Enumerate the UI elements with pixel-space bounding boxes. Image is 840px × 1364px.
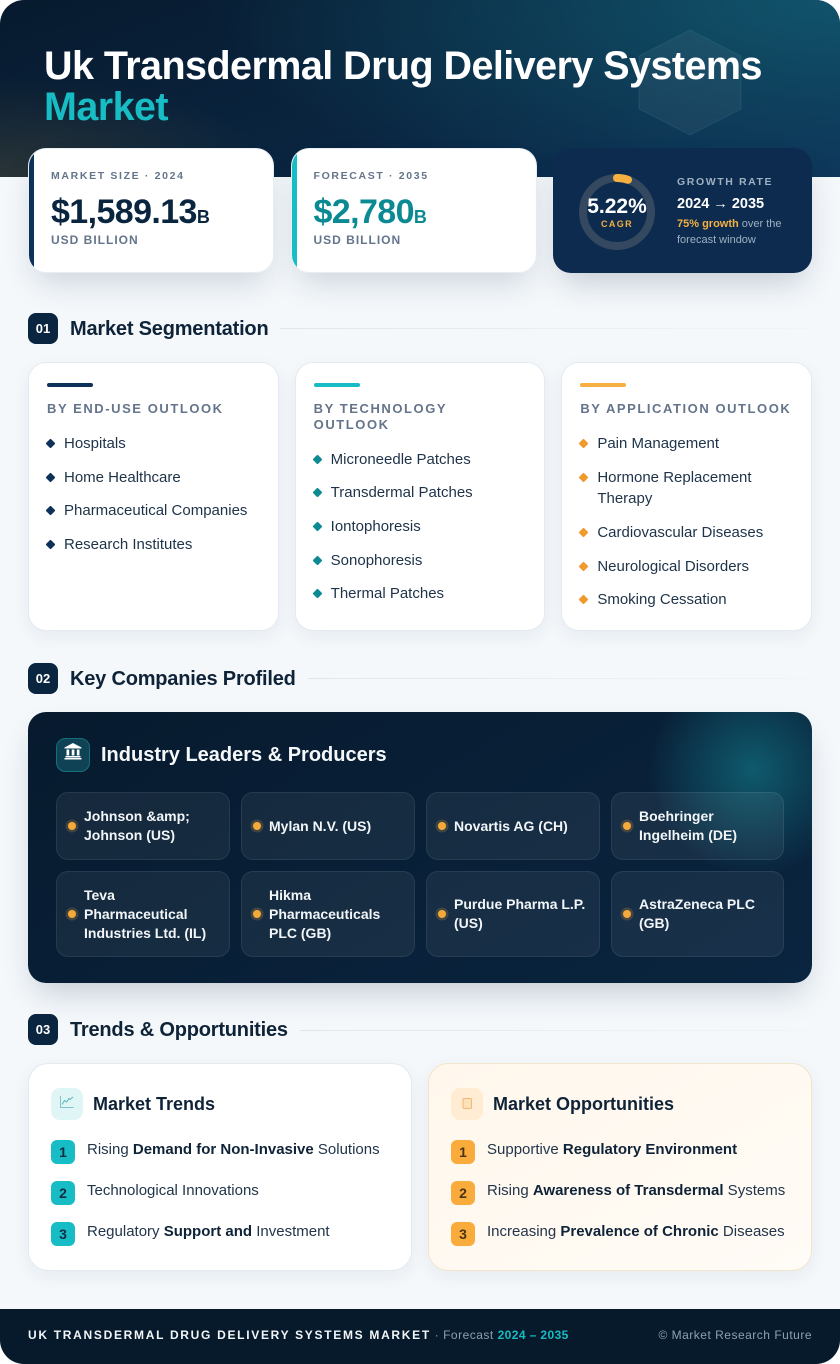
footer title: UK TRANSDERMAL DRUG DELIVERY SYSTEMS MARKET · Forecast 2024 – 2035	[28, 1328, 569, 1342]
panel: end-use: BY END-USE OUTLOOK	[47, 401, 224, 416]
opportunity 1	[451, 1140, 475, 1164]
section badge 01	[28, 313, 58, 344]
CAGR label: CAGR	[601, 219, 633, 229]
opportunity 3	[451, 1222, 475, 1246]
trend 2: 2	[59, 1185, 67, 1201]
trend 2	[51, 1181, 75, 1205]
growth label: GROWTH RATE	[677, 176, 773, 188]
stat card: forecast	[290, 148, 536, 273]
opportunity 1: 1	[459, 1144, 467, 1160]
card heading: Market Trends	[93, 1094, 215, 1114]
panel: market trends: Technological Innovations	[87, 1182, 259, 1198]
trend 3: 3	[59, 1226, 67, 1242]
stat card: forecast: USD BILLION	[314, 233, 401, 247]
trend 1	[51, 1140, 75, 1164]
panel: application	[561, 362, 812, 631]
panel: technology: BY TECHNOLOGY OUTLOOK	[314, 401, 447, 432]
panel: end-use: Hospitals	[64, 435, 126, 452]
icon: institution	[56, 738, 90, 772]
stat card: market size: $1,589.13B	[51, 193, 210, 231]
company chip	[426, 871, 600, 957]
stat card: growth rate	[553, 148, 812, 273]
panel: market opportunities: Rising Awareness of Transdermal Systems	[487, 1182, 785, 1198]
footer	[0, 1309, 840, 1364]
panel: end-use	[28, 362, 279, 631]
panel: technology: Transdermal Patches	[331, 484, 473, 501]
company chip: Boehringer Ingelheim (DE)	[639, 808, 737, 843]
panel: technology: Sonophoresis	[331, 552, 422, 569]
panel: end-use: Home Healthcare	[64, 469, 181, 486]
opportunity 2	[451, 1181, 475, 1205]
growth years: 2024 → 2035	[677, 196, 764, 212]
section badge 03	[28, 1014, 58, 1045]
panel: companies	[28, 712, 812, 983]
stat card: forecast: FORECAST · 2035	[314, 170, 429, 182]
card heading: Market Opportunities	[493, 1094, 674, 1114]
panel: market opportunities: Increasing Prevalence of Chronic Diseases	[487, 1222, 785, 1240]
section heading: companies: Key Companies Profiled	[70, 668, 296, 690]
growth note: 75% growth over the forecast window	[677, 218, 782, 246]
header banner	[0, 0, 840, 177]
company chip: Hikma Pharmaceuticals PLC (GB)	[269, 886, 380, 940]
panel: application: Smoking Cessation	[597, 591, 727, 608]
company chip: Johnson &amp; Johnson (US)	[84, 808, 190, 843]
CAGR value: 5.22%	[587, 195, 647, 218]
panel: application: Cardiovascular Diseases	[597, 524, 763, 541]
company chip: Mylan N.V. (US)	[269, 818, 371, 834]
section heading: segmentation: Market Segmentation	[70, 318, 268, 340]
section badge 01: 01	[36, 321, 50, 336]
panel: application: BY APPLICATION OUTLOOK	[580, 401, 791, 416]
title	[44, 44, 762, 129]
panel: application: Neurological Disorders	[597, 558, 749, 575]
stat card: market size: USD BILLION	[51, 233, 139, 247]
panel: end-use: Pharmaceutical Companies	[64, 502, 247, 519]
trend 1: 1	[59, 1144, 67, 1160]
opportunity 3: 3	[459, 1226, 467, 1242]
panel: technology	[295, 362, 545, 631]
footer credit: © Market Research Future	[658, 1328, 812, 1342]
panel: market opportunities: Supportive Regulatory Environment	[487, 1140, 737, 1158]
icon: chart	[51, 1088, 83, 1120]
panel: end-use: Research Institutes	[64, 536, 192, 553]
opportunity 2: 2	[459, 1185, 467, 1201]
stat card: market size: MARKET SIZE · 2024	[51, 170, 185, 182]
section badge 02	[28, 663, 58, 694]
title: Uk Transdermal Drug Delivery Systems	[44, 44, 762, 88]
panel: technology: Microneedle Patches	[331, 450, 471, 468]
company chip	[426, 792, 600, 860]
panel heading: Industry Leaders & Producers	[101, 744, 387, 766]
stat card: forecast: $2,780B	[314, 193, 427, 231]
decorative hexagon	[638, 30, 742, 136]
company chip: AstraZeneca PLC (GB)	[639, 896, 755, 931]
company chip	[241, 871, 415, 957]
CAGR ring	[579, 174, 655, 250]
section heading: trends: Trends & Opportunities	[70, 1019, 288, 1041]
section badge 02: 02	[36, 671, 50, 686]
company chip	[611, 871, 784, 957]
section badge 03: 03	[36, 1022, 50, 1037]
company chip: Purdue Pharma L.P. (US)	[454, 896, 585, 931]
company chip: Novartis AG (CH)	[454, 818, 568, 834]
icon: missing glyph box	[451, 1088, 483, 1120]
company chip	[241, 792, 415, 860]
company chip: Teva Pharmaceutical Industries Ltd. (IL)	[84, 886, 206, 940]
panel: market trends: Regulatory Support and Investment	[87, 1222, 330, 1240]
panel: technology: Iontophoresis	[331, 518, 421, 535]
title: Market	[44, 85, 168, 129]
trend 3	[51, 1222, 75, 1246]
panel: market trends: Rising Demand for Non-Invasive Solutions	[87, 1140, 380, 1158]
stat card: market size	[28, 148, 274, 273]
panel: application: Hormone Replacement Therapy	[597, 469, 752, 507]
company chip	[611, 792, 784, 860]
company chip	[56, 792, 230, 860]
panel: market opportunities	[428, 1063, 812, 1271]
company chip	[56, 871, 230, 957]
panel: application: Pain Management	[597, 435, 719, 452]
panel: market trends	[28, 1063, 412, 1271]
panel: technology: Thermal Patches	[331, 585, 444, 602]
